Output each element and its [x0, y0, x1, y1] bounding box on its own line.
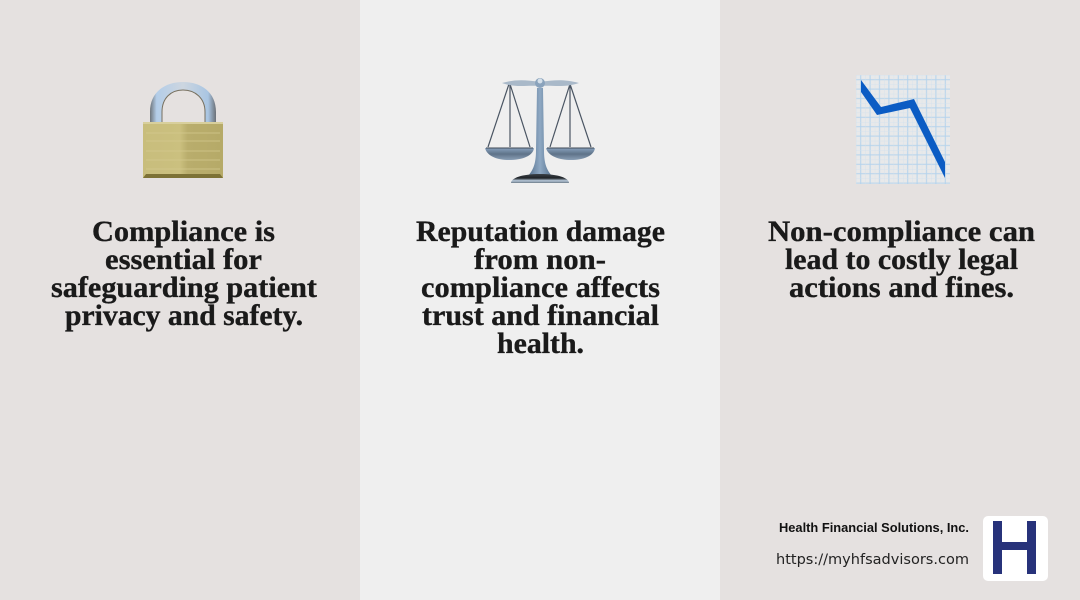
heading: reputation statement: trust and financial [422, 300, 659, 332]
heading: legal costs statement [768, 216, 1035, 304]
heading: reputation statement: Reputation damage [416, 216, 665, 248]
icon: balance scale [485, 78, 595, 183]
heading: reputation statement [416, 216, 665, 360]
heading: legal costs statement: Non-compliance can [768, 216, 1035, 248]
heading: compliance statement: safeguarding patient [51, 272, 317, 304]
heading: compliance statement: essential for [105, 244, 262, 276]
panel: compliance [0, 0, 360, 600]
heading: compliance statement: Compliance is [92, 216, 275, 248]
heading: reputation statement: compliance affects [421, 272, 660, 304]
heading: legal costs statement: actions and fines. [789, 272, 1014, 304]
heading: compliance statement: privacy and safety. [65, 300, 303, 332]
heading: reputation statement: from non- [474, 244, 606, 276]
icon: padlock [143, 82, 223, 178]
heading: reputation statement: health. [497, 328, 584, 360]
logo: H mark [983, 516, 1048, 581]
panel: reputation [360, 0, 720, 600]
heading: legal costs statement: lead to costly legal [785, 244, 1018, 276]
company name: Health Financial Solutions, Inc. [779, 520, 969, 535]
panel: legal costs [720, 0, 1080, 600]
icon: falling chart [856, 75, 950, 184]
heading: compliance statement [51, 216, 317, 332]
company url: https://myhfsadvisors.com [776, 552, 969, 568]
